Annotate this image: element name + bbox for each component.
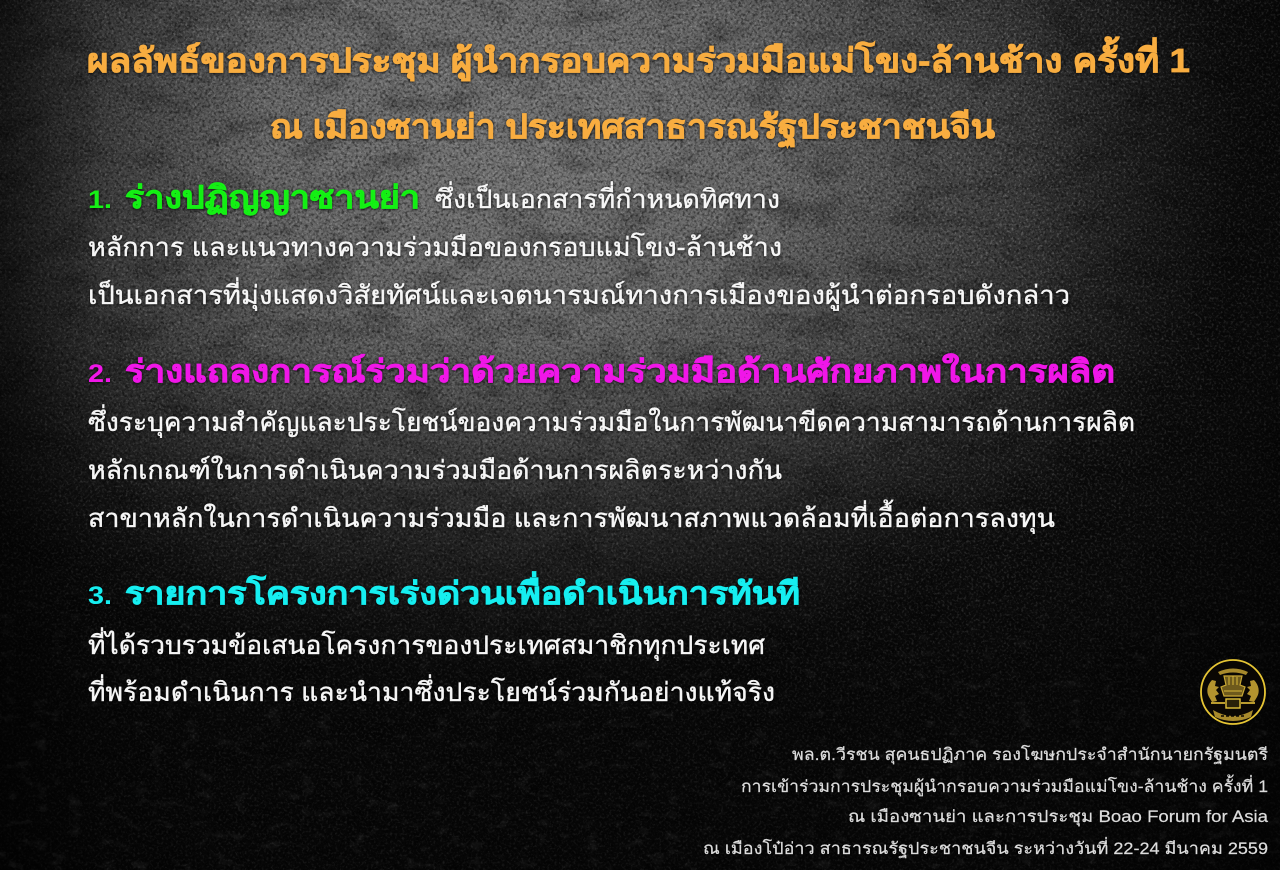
title: ณ เมืองซานย่า ประเทศสาธารณรัฐประชาชนจีน <box>270 108 995 148</box>
text block: item 2 description: หลักเกณฑ์ในการดำเนินความร่วมมือด้านการผลิตระหว่างกัน <box>88 455 782 485</box>
text block: item 1 description: ซึ่งเป็นเอกสารที่กำหนดทิศทาง <box>435 181 780 214</box>
text block: item 3 description: ที่พร้อมดำเนินการ และนำมาซึ่งประโยชน์ร่วมกันอย่างแท้จริง <box>88 674 775 707</box>
heading: item 3: 3. <box>88 582 112 610</box>
text block: footer credit: พล.ต.วีรชน สุคนธปฏิภาค รองโฆษกประจำสำนักนายกรัฐมนตรี <box>792 745 1268 765</box>
heading: item 3: รายการโครงการเร่งด่วนเพื่อดำเนินการทันที <box>125 571 800 611</box>
text block: item 2 description: สาขาหลักในการดำเนินความร่วมมือ และการพัฒนาสภาพแวดล้อมที่เอื้อต่อการลงทุน <box>88 499 1055 534</box>
text block: footer credit <box>703 745 1269 858</box>
text block: item 1 description: หลักการ และแนวทางความร่วมมือของกรอบแม่โขง-ล้านช้าง <box>88 232 782 262</box>
text block: footer credit: ณ เมืองโป๋อ่าว สาธารณรัฐประชาชนจีน ระหว่างวันที่ 22-24 มีนาคม 2559 <box>703 837 1268 858</box>
icon: government emblem seal <box>1201 660 1265 724</box>
text block: item 1 description <box>88 181 1070 311</box>
title: ผลลัพธ์ของการประชุม ผู้นำกรอบความร่วมมือแม่โขง-ล้านช้าง ครั้งที่ 1 <box>87 36 1190 82</box>
text block: footer credit: การเข้าร่วมการประชุมผู้นำกรอบความร่วมมือแม่โขง-ล้านช้าง ครั้งที่ 1 <box>741 774 1268 797</box>
text block: item 3 description: ที่ได้รวบรวมข้อเสนอโครงการของประเทศสมาชิกทุกประเทศ <box>88 627 765 661</box>
heading: item 2: ร่างแถลงการณ์ร่วมว่าด้วยความร่วมมือด้านศักยภาพในการผลิต <box>125 353 1115 389</box>
title <box>87 36 1190 148</box>
heading: item 1: 1. <box>88 186 112 214</box>
text block: item 2 description <box>88 404 1135 534</box>
heading: item 2: 2. <box>88 360 112 388</box>
heading: item 1: ร่างปฏิญญาซานย่า <box>125 180 420 216</box>
text block: item 1 description: เป็นเอกสารที่มุ่งแสดงวิสัยทัศน์และเจตนารมณ์ทางการเมืองของผู้นำต่อกรอบดังกล่าว <box>88 277 1070 311</box>
text block: footer credit: ณ เมืองซานย่า และการประชุม Boao Forum for Asia <box>848 808 1269 827</box>
text block: item 2 description: ซึ่งระบุความสำคัญและประโยชน์ของความร่วมมือในการพัฒนาขีดความสามารถด้านการผลิต <box>88 404 1135 438</box>
panel: item 3, urgent project list <box>88 571 800 707</box>
text block: item 3 description <box>88 627 775 707</box>
panel: item 1, Sanya declaration <box>88 180 1070 311</box>
panel: item 2, joint statement on production capacity <box>88 353 1135 534</box>
